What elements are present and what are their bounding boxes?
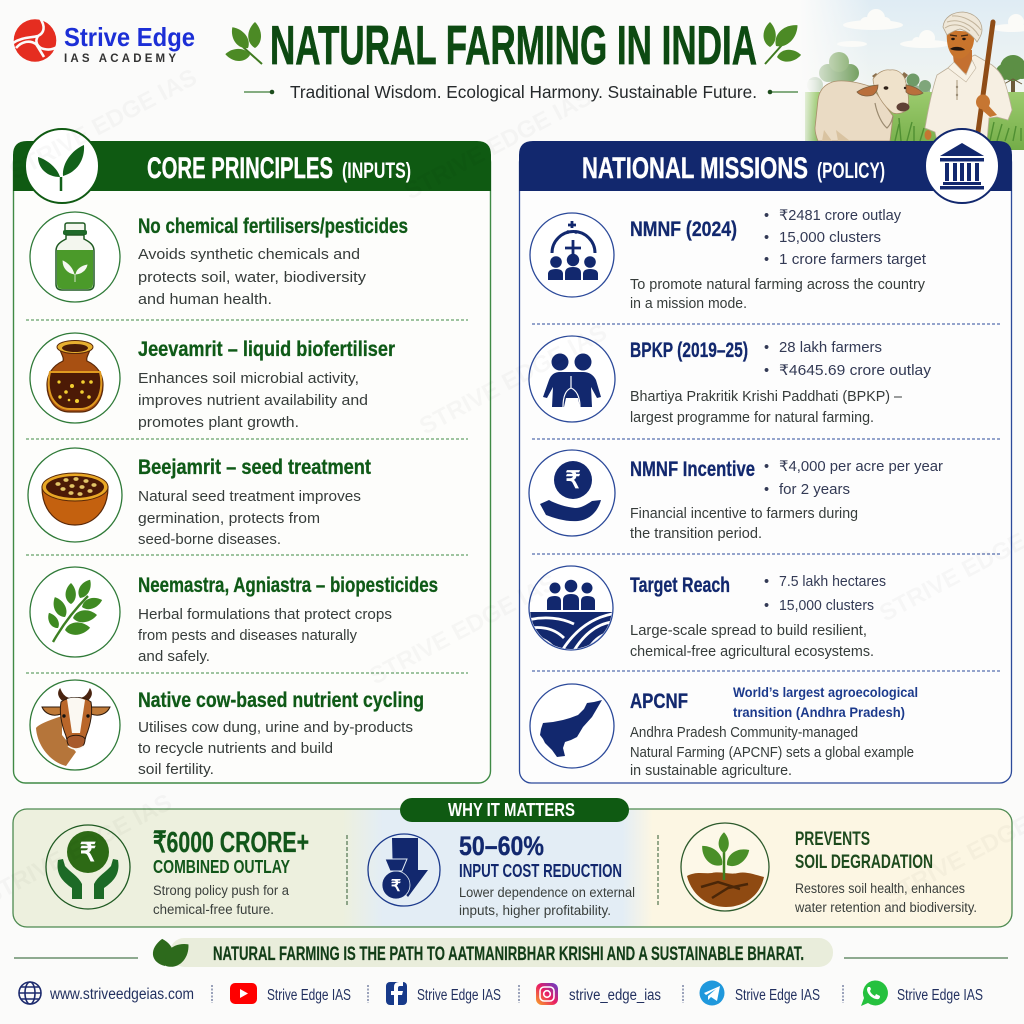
footer: contact links <box>19 980 983 1006</box>
figure: ₹6000 CRORE+ <box>153 827 309 859</box>
heading: Native cow-based nutrient cycling <box>138 688 424 712</box>
description: to recycle nutrients and build <box>138 741 333 757</box>
website: www.striveedgeias.com <box>49 986 194 1003</box>
description: soil fertility. <box>138 762 214 778</box>
description: protects soil, water, biodiversity <box>138 270 367 286</box>
whatsapp: Strive Edge IAS <box>897 987 983 1004</box>
heading: BPKP (2019–25) <box>630 338 748 362</box>
header illustration: farmer and cow in a field <box>800 0 1024 150</box>
icon: Andhra Pradesh map <box>530 684 614 768</box>
panel header: core principles <box>13 141 491 191</box>
icon: rupee in hand: ₹ <box>565 467 581 494</box>
key facts: for 2 years <box>779 482 850 498</box>
description: chemical-free agricultural ecosystems. <box>630 644 874 660</box>
description <box>630 277 926 312</box>
title text: NATURAL FARMING IN INDIA <box>270 14 757 76</box>
key facts: • <box>764 574 769 590</box>
stat: soil degradation <box>681 823 977 915</box>
facebook <box>386 982 501 1005</box>
description <box>138 371 368 431</box>
key facts: 1 crore farmers target <box>779 252 926 268</box>
description: Restores soil health, enhances <box>795 881 965 896</box>
facebook: Strive Edge IAS <box>417 987 501 1004</box>
description: largest programme for natural farming. <box>630 410 874 426</box>
mission: BPKP <box>529 336 932 426</box>
heading: Jeevamrit – liquid biofertiliser <box>138 337 396 361</box>
youtube <box>230 983 351 1004</box>
callout: World’s largest agroecological <box>733 684 918 700</box>
label <box>795 829 933 873</box>
description: promotes plant growth. <box>138 415 299 431</box>
icon: bottle <box>30 212 120 302</box>
key facts <box>764 208 926 268</box>
whatsapp <box>861 980 983 1006</box>
key facts: • <box>764 252 769 268</box>
principle: jeevamrit <box>30 333 396 431</box>
label: COMBINED OUTLAY <box>153 856 290 877</box>
watermarks: STRIVE EDGE IAS <box>365 569 562 690</box>
key facts: 15,000 clusters <box>779 598 874 614</box>
description: and human health. <box>138 292 272 308</box>
icon: sprout badge <box>25 129 99 203</box>
heading: APCNF <box>630 689 688 713</box>
description: the transition period. <box>630 526 762 542</box>
principle: native cow <box>30 680 424 778</box>
grass tufts <box>895 118 1021 141</box>
stat: input cost reduction <box>368 831 635 918</box>
description: Natural seed treatment improves <box>138 489 361 505</box>
key facts <box>764 574 886 614</box>
heading: NMNF (2024) <box>630 217 737 241</box>
farmer <box>924 12 1012 141</box>
key facts: • <box>764 230 769 246</box>
description: Andhra Pradesh Community-managed <box>630 725 858 741</box>
principle: beejamrit <box>28 448 371 548</box>
key facts: • <box>764 598 769 614</box>
key facts: 7.5 lakh hectares <box>779 574 886 590</box>
website <box>19 982 194 1004</box>
key facts: ₹2481 crore outlay <box>779 208 902 224</box>
description: germination, protects from <box>138 511 320 527</box>
description: Herbal formulations that protect crops <box>138 607 392 623</box>
panel header: national missions: NATIONAL MISSIONS <box>582 152 808 185</box>
closing banner <box>14 938 1008 972</box>
cow <box>815 70 923 141</box>
description: seed-borne diseases. <box>138 532 281 548</box>
panel header: core principles: (INPUTS) <box>342 158 411 183</box>
icon: plant in soil <box>681 823 769 911</box>
description: Strong policy push for a <box>153 883 289 898</box>
heading: No chemical fertilisers/pesticides <box>138 214 408 238</box>
left leaf sprig <box>225 22 262 64</box>
description <box>794 881 977 915</box>
description: Bhartiya Prakritik Krishi Paddhati (BPKP) – <box>630 389 903 405</box>
key facts: • <box>764 208 769 224</box>
watermarks: STRIVE EDGE IAS <box>5 64 202 185</box>
watermarks: STRIVE EDGE IAS <box>400 84 597 205</box>
heading: Beejamrit – seed treatment <box>138 455 371 479</box>
logo <box>13 18 195 65</box>
key facts <box>764 459 943 498</box>
description <box>138 720 413 778</box>
icon: neem branch <box>30 567 120 657</box>
trees <box>807 52 1024 95</box>
icon: farming family <box>529 336 615 422</box>
description <box>630 623 874 660</box>
mission: NMNF 2024 <box>530 208 926 312</box>
heading: Neemastra, Agniastra – biopesticides <box>138 573 438 597</box>
subtitle: Traditional Wisdom. Ecological Harmony. Sustainable Future. <box>290 82 757 102</box>
brand tagline: IAS ACADEMY <box>64 53 176 65</box>
key facts: • <box>764 459 769 475</box>
description: Avoids synthetic chemicals and <box>138 247 360 263</box>
description: chemical-free future. <box>153 902 274 917</box>
instagram <box>536 983 661 1005</box>
telegram: Strive Edge IAS <box>735 987 820 1004</box>
panel: national missions <box>519 129 1012 783</box>
description: Large-scale spread to build resilient, <box>630 623 867 639</box>
icon: rupee in hand <box>529 450 615 536</box>
description: Natural Farming (APCNF) sets a global example <box>630 745 914 761</box>
description: Enhances soil microbial activity, <box>138 371 359 387</box>
mission: APCNF <box>530 684 918 779</box>
mission: NMNF incentive <box>529 450 943 542</box>
panel header: core principles: CORE PRINCIPLES <box>147 152 333 185</box>
icon: hands holding rupee: ₹ <box>80 837 96 867</box>
field <box>805 92 1024 150</box>
panel header: national missions <box>519 141 1012 191</box>
panel: core principles <box>13 129 491 783</box>
description: Financial incentive to farmers during <box>630 506 858 522</box>
figure: 50–60% <box>459 831 544 861</box>
stat: combined outlay <box>46 825 309 917</box>
watermarks: STRIVE EDGE IAS <box>415 319 612 440</box>
callout <box>733 684 918 720</box>
panel: why it matters <box>13 798 1012 927</box>
icon: seed bowl <box>28 448 122 542</box>
telegram <box>700 980 820 1006</box>
principle: no chemicals <box>30 212 408 308</box>
description: Utilises cow dung, urine and by-products <box>138 720 413 736</box>
callout: transition (Andhra Pradesh) <box>733 704 905 720</box>
description: in sustainable agriculture. <box>630 763 792 779</box>
key facts <box>764 340 932 379</box>
key facts: • <box>764 363 769 379</box>
description: To promote natural farming across the country <box>630 277 926 293</box>
heading pill: why it matters <box>400 798 629 822</box>
principle: neemastra agniastra <box>30 567 438 665</box>
icon: people under compass <box>530 213 614 297</box>
icon: jeevamrit pot <box>30 333 120 423</box>
label: PREVENTS <box>795 829 870 850</box>
panel header: national missions: (POLICY) <box>817 158 885 183</box>
label: SOIL DEGRADATION <box>795 852 933 873</box>
icon: twin leaves <box>151 938 194 972</box>
icon: falling cost money bag: ₹ <box>391 878 401 895</box>
key facts: 15,000 clusters <box>779 230 881 246</box>
clouds <box>837 9 1024 48</box>
description: from pests and diseases naturally <box>138 628 358 644</box>
description <box>459 885 635 918</box>
heading pill: why it matters: WHY IT MATTERS <box>448 800 575 820</box>
description <box>630 725 914 779</box>
description: inputs, higher profitability. <box>459 903 611 918</box>
title <box>225 14 802 76</box>
key facts: 28 lakh farmers <box>779 340 882 356</box>
icon: cow head <box>30 680 120 770</box>
description <box>138 247 367 308</box>
description: water retention and biodiversity. <box>794 900 977 915</box>
heading: NMNF Incentive <box>630 457 755 481</box>
icon: people over fields <box>528 566 613 654</box>
description <box>153 883 289 917</box>
label: INPUT COST REDUCTION <box>459 860 622 881</box>
icon: falling cost money bag <box>368 834 440 906</box>
description <box>630 389 903 426</box>
description: improves nutrient availability and <box>138 393 368 409</box>
mission: target reach <box>528 566 886 660</box>
description <box>138 607 392 665</box>
description: in a mission mode. <box>630 296 747 312</box>
key facts: • <box>764 340 769 356</box>
icon: government building badge <box>925 129 999 203</box>
description: and safely. <box>138 649 210 665</box>
description <box>630 506 858 542</box>
logo mark <box>13 18 57 62</box>
key facts: ₹4,000 per acre per year <box>779 459 943 475</box>
key facts: ₹4645.69 crore outlay <box>779 363 932 379</box>
description: Lower dependence on external <box>459 885 635 900</box>
heading: Target Reach <box>630 573 730 597</box>
description <box>138 489 361 548</box>
icon: hands holding rupee <box>46 825 130 909</box>
right leaf sprig <box>764 20 802 64</box>
key facts: • <box>764 482 769 498</box>
instagram: strive_edge_ias <box>569 987 661 1004</box>
youtube: Strive Edge IAS <box>267 987 351 1004</box>
brand name: Strive Edge <box>64 22 195 52</box>
